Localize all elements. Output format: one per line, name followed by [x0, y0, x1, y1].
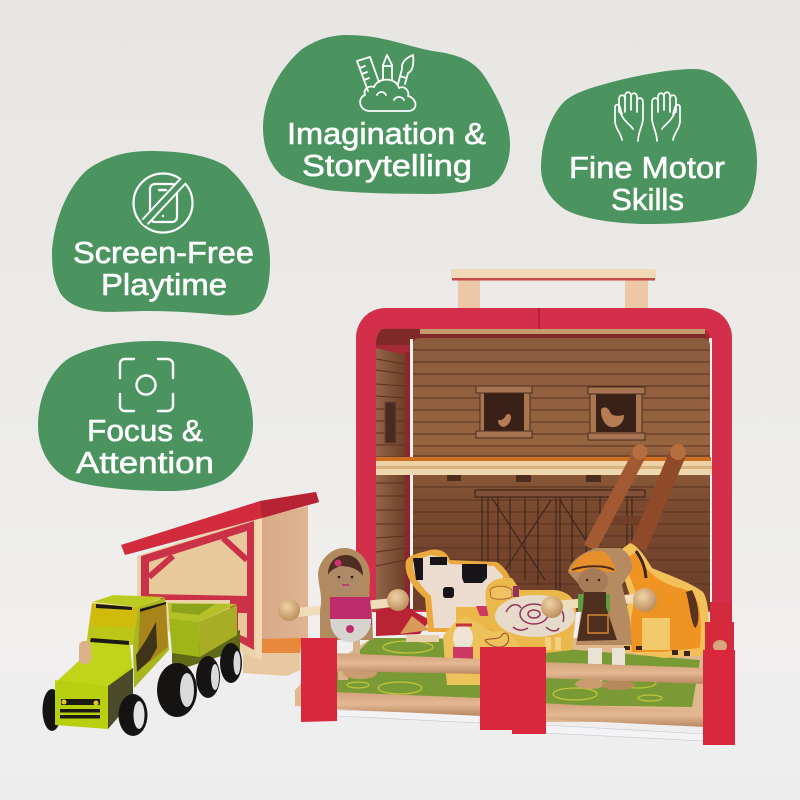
exhaust	[79, 641, 91, 664]
far wheel	[42, 689, 62, 731]
fence	[301, 638, 735, 745]
horse	[615, 543, 709, 658]
label: Storytelling	[302, 148, 472, 183]
badge: screen-free playtime	[52, 151, 270, 315]
icon: art supplies in cloud	[357, 55, 416, 111]
wagon wheels	[196, 643, 242, 698]
chicken	[443, 617, 520, 685]
side wall	[376, 348, 405, 610]
shed roof	[121, 492, 319, 555]
tractor	[42, 595, 197, 736]
hood	[55, 640, 133, 729]
badge: imagination and storytelling	[263, 35, 510, 194]
sheep	[486, 578, 576, 655]
label	[287, 116, 486, 183]
shelf	[376, 457, 712, 482]
figure: boy	[541, 548, 657, 690]
icon: crossed out phone	[134, 174, 192, 232]
badge: focus and attention	[38, 341, 253, 491]
window left	[476, 386, 532, 438]
small back fence posts	[705, 602, 734, 652]
cab	[133, 598, 169, 688]
label	[76, 413, 214, 480]
label	[73, 235, 254, 302]
ladder	[590, 444, 686, 548]
icon: focus frame	[120, 359, 173, 411]
figure: girl	[278, 548, 409, 680]
label: Playtime	[101, 267, 227, 302]
farm base and green mat	[295, 635, 712, 722]
label: Imagination &	[287, 116, 486, 151]
tractor wagon	[168, 603, 242, 698]
label: Fine Motor	[569, 150, 725, 185]
side window	[385, 402, 396, 443]
fence rails	[332, 653, 705, 727]
boy arms	[557, 593, 642, 610]
girl arms	[278, 589, 409, 621]
shed inner side wall	[260, 506, 308, 640]
shed	[121, 492, 319, 676]
barn interior	[376, 329, 711, 610]
label: Attention	[76, 445, 214, 480]
cow	[406, 549, 510, 632]
grille	[60, 699, 100, 718]
barn doors	[475, 490, 645, 590]
shed front wall	[137, 516, 260, 660]
badge: fine motor skills	[541, 69, 757, 224]
fence posts	[301, 638, 735, 745]
window right	[588, 387, 645, 440]
label: Screen-Free	[73, 235, 254, 270]
icon: two hands	[615, 92, 680, 141]
rear wheel	[157, 663, 197, 717]
barn floor hinge	[376, 605, 430, 636]
barn	[356, 308, 732, 636]
label: Skills	[611, 182, 684, 217]
label	[569, 150, 725, 217]
barn handle	[451, 269, 656, 309]
label: Focus &	[87, 413, 203, 448]
front wheel	[118, 694, 148, 736]
